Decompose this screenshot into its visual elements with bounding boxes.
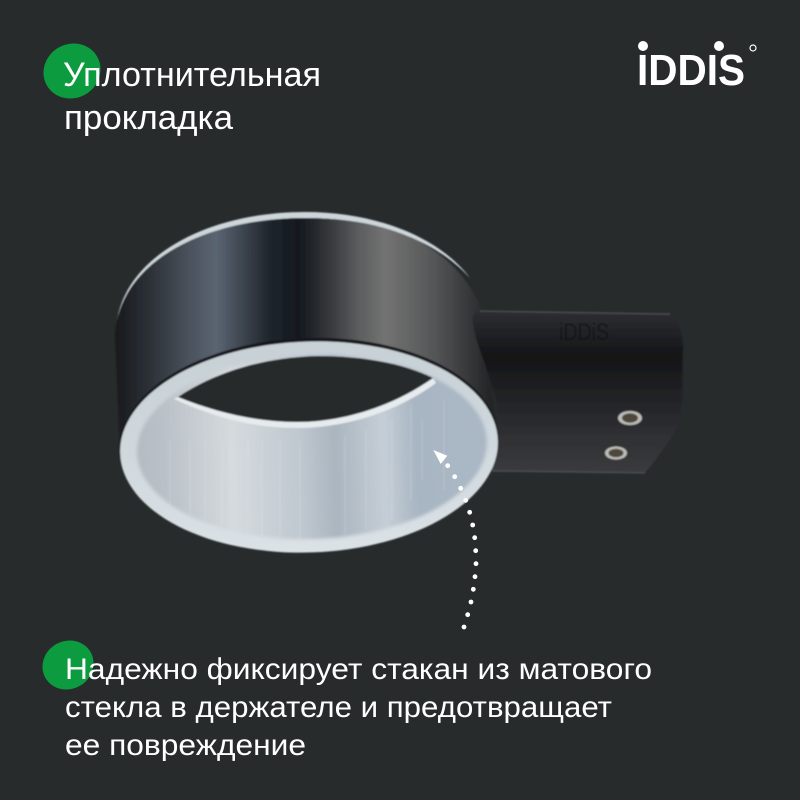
description text <box>65 653 652 762</box>
gasket ring <box>116 335 502 559</box>
ring opening <box>178 356 433 422</box>
title: прокладка <box>64 99 233 137</box>
screw lower <box>605 446 627 460</box>
description text: ее повреждение <box>65 729 306 762</box>
ring body <box>115 218 498 447</box>
highlight under opening <box>174 378 436 428</box>
engraved logo: iDDiS <box>559 319 609 346</box>
description text: Надежно фиксирует стакан из матового <box>65 653 652 686</box>
description text: стекла в держателе и предотвращает <box>65 691 612 724</box>
bracket edge highlights <box>480 311 670 473</box>
arrowhead <box>433 450 447 464</box>
dark edge under band <box>115 331 503 559</box>
dotted arrow <box>433 450 478 629</box>
dots <box>445 463 478 629</box>
inner wall <box>134 349 490 545</box>
top rim of gasket <box>116 212 470 330</box>
green accent blob: title <box>33 33 111 109</box>
title: Уплотнительная <box>63 56 321 94</box>
wall mount bracket <box>473 311 683 473</box>
green accent blob: description <box>33 631 103 699</box>
title <box>63 56 321 137</box>
logo: iddis: IDDIS <box>637 46 745 95</box>
product photo: ring holder with gasket <box>115 212 683 559</box>
screw upper <box>618 411 642 425</box>
